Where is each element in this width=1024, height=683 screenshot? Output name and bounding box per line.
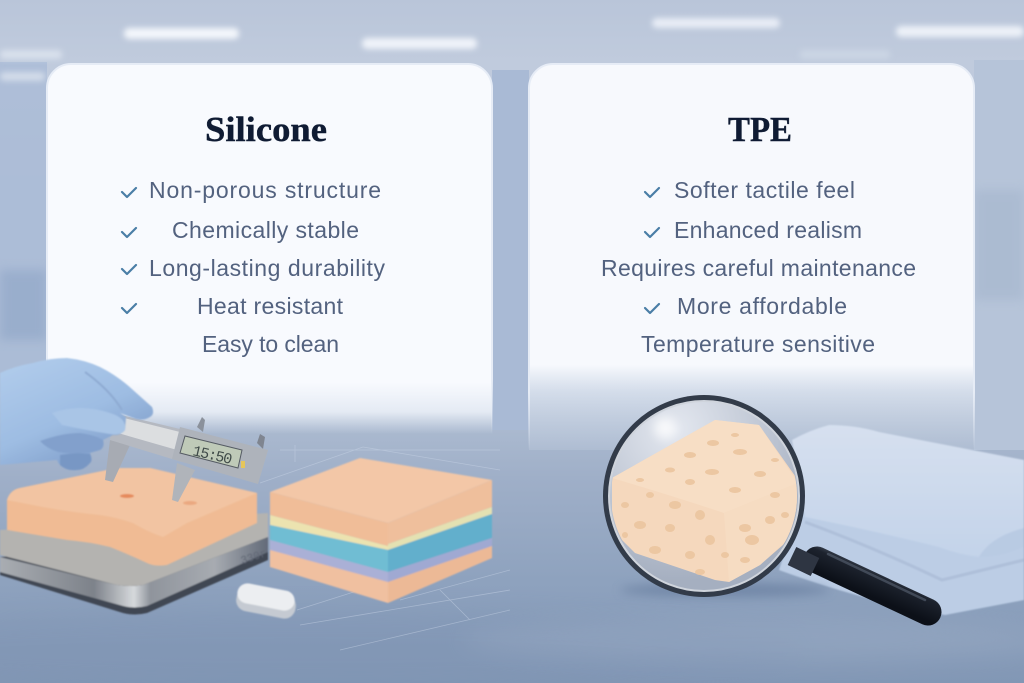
- heading: Silicone: Silicone: [205, 110, 327, 149]
- silicone sample: skin block: [7, 468, 257, 566]
- feature list: TPE: Temperature sensitive: [641, 331, 875, 357]
- scale label: 330г: [240, 548, 268, 568]
- feature list: Silicone: Non-porous structure: [149, 177, 381, 203]
- caliper display reading: 15:50: [191, 443, 234, 469]
- feature list: Silicone: Heat resistant: [197, 293, 344, 319]
- handle: [792, 554, 928, 612]
- blueprint grid on the floor: [260, 445, 510, 650]
- white pill eraser: [234, 582, 298, 621]
- gloved hand: [0, 358, 153, 470]
- heading: TPE: TPE: [728, 110, 792, 149]
- feature list: Silicone: [122, 177, 386, 357]
- feature list: TPE: Softer tactile feel: [674, 177, 855, 203]
- panel: Silicone card: [47, 64, 492, 434]
- feature list: Silicone: Chemically stable: [172, 217, 359, 243]
- panel: TPE card: [529, 64, 974, 450]
- towel: [779, 425, 1024, 615]
- feature list: Silicone: Long-lasting durability: [149, 255, 386, 281]
- pores: [621, 433, 789, 575]
- magnifying glass with porous sample: [603, 395, 928, 612]
- feature list: TPE: [601, 177, 916, 357]
- feature list: TPE: Requires careful maintenance: [601, 255, 916, 281]
- scale with sand: [0, 513, 268, 614]
- layered sample block: [270, 458, 492, 603]
- feature list: TPE: Enhanced realism: [674, 217, 862, 243]
- feature list: TPE: More affordable: [677, 293, 847, 319]
- caliper: [105, 413, 268, 502]
- feature list: Silicone: Easy to clean: [202, 331, 339, 357]
